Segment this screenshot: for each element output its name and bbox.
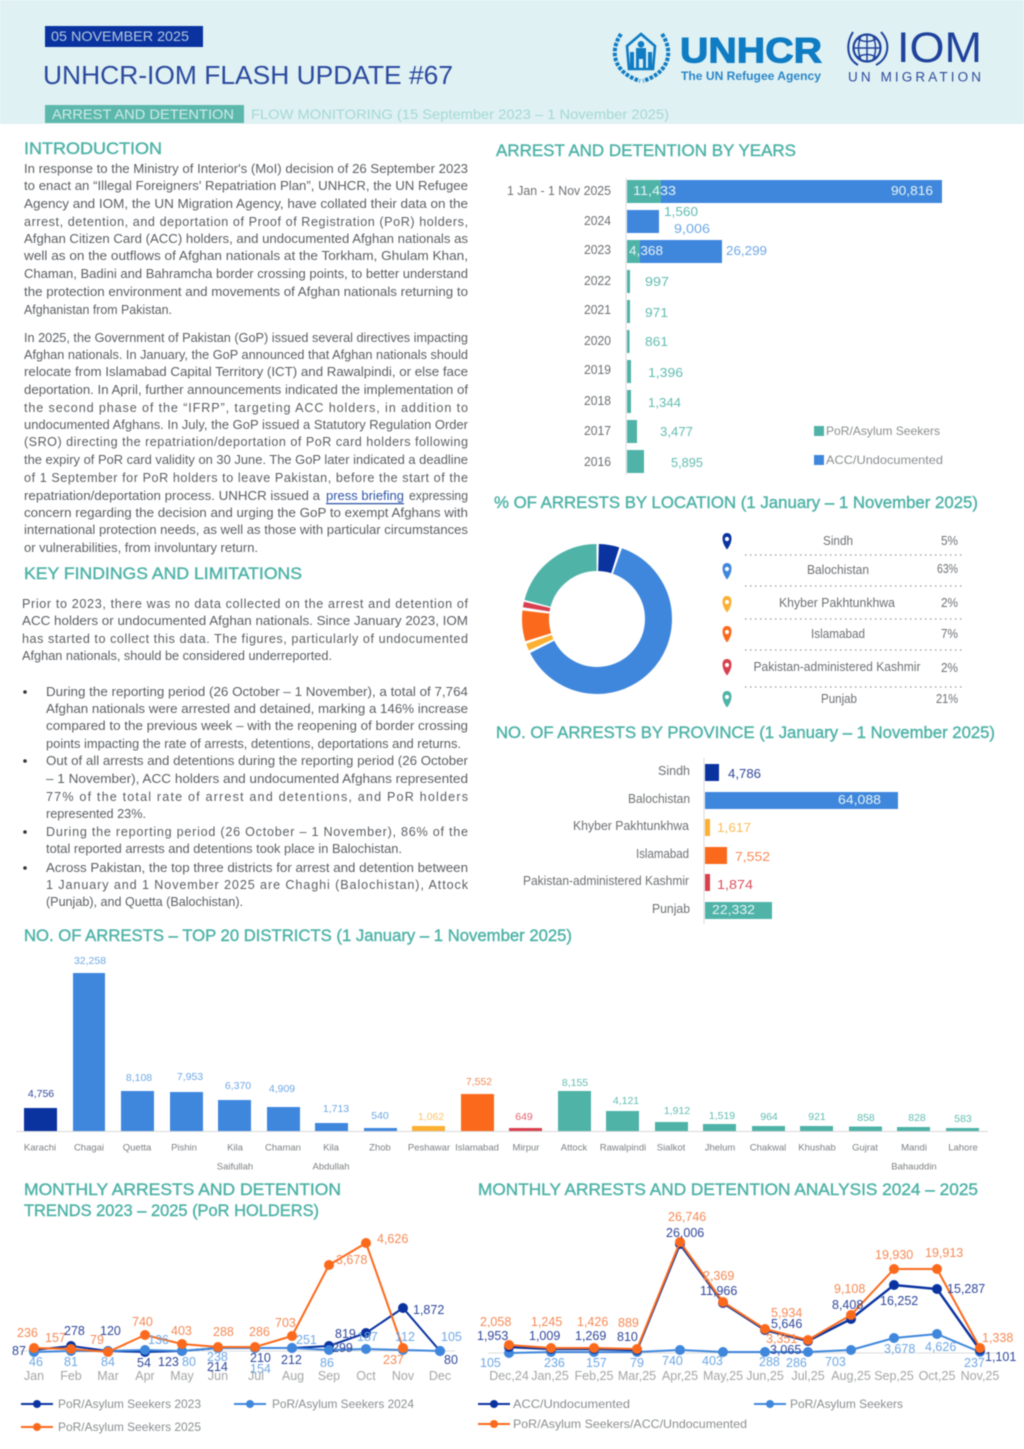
line chart: monthly analysis: 1,009 [529, 1329, 560, 1343]
text block: introduction paragraph 2: international protection needs, as well as those with particular circumstances [24, 523, 468, 537]
line chart: monthly analysis: Apr,25 [662, 1369, 698, 1383]
line chart: monthly trends: 120 [100, 1324, 121, 1338]
text block: bullet list: compared to the previous week – with the reopening of border crossing [46, 719, 468, 733]
icon: pin Khyber Pakhtunkhwa [722, 596, 732, 612]
line chart: monthly trends: May [170, 1369, 195, 1383]
line chart: monthly analysis: 810 [617, 1330, 638, 1344]
line chart: monthly trends: 214 [207, 1360, 228, 1374]
chart legend: by years [814, 424, 943, 467]
line chart: monthly analysis: Jun,25 [746, 1369, 784, 1383]
line chart: monthly analysis: 8,408 [832, 1298, 863, 1312]
line chart: monthly analysis: Mar,25 [618, 1369, 656, 1383]
line chart: monthly trends: 81 [64, 1355, 78, 1369]
line chart: monthly trends: 278 [64, 1324, 85, 1338]
chart legend: monthly analysis: PoR/Asylum Seekers [790, 1397, 903, 1411]
location legend: Sindh [823, 534, 853, 548]
logo: UNHCR [615, 32, 822, 83]
line chart: monthly analysis: 11,966 [700, 1284, 737, 1298]
logo: UNHCR: UNHCR [680, 32, 822, 70]
line chart: monthly trends: 3,678 [336, 1253, 367, 1267]
line chart: monthly analysis: Jan,25 [531, 1369, 569, 1383]
bar chart: top 20 districts: Saifullah [217, 1162, 253, 1172]
line chart: monthly analysis: 3,351 [766, 1332, 797, 1346]
chart legend: monthly analysis [478, 1397, 903, 1431]
line chart: monthly analysis: 3,065 [770, 1343, 801, 1357]
chart legend: monthly trends: PoR/Asylum Seekers 2024 [272, 1397, 414, 1411]
bar chart: top 20 districts: Quetta [123, 1142, 152, 1154]
bar chart: by years: 2023 [584, 243, 611, 257]
line chart: monthly trends: 1,872 [413, 1303, 444, 1317]
line chart: monthly analysis: 288 [759, 1355, 780, 1369]
line chart: monthly analysis: 889 [618, 1316, 639, 1330]
location legend: Pakistan-administered Kashmir [754, 660, 920, 674]
text block: bullet list: – 1 November), ACC holders and undocumented Afghans represented [46, 772, 468, 786]
line chart: monthly analysis: 236 [544, 1356, 565, 1370]
bar chart: top 20 districts: 828 [908, 1112, 926, 1124]
heading: monthly analysis: MONTHLY ARRESTS AND DETENTION ANALYSIS 2024 – 2025 [478, 1181, 978, 1199]
text block: introduction paragraph 2: the expiry of PoR card validity on 30 June. The GoP later indicated a deadline [24, 453, 468, 467]
bar chart: top 20 districts [16, 955, 988, 1172]
panel: top 20 districts [16, 927, 988, 1172]
line chart: monthly analysis: Aug,25 [831, 1369, 871, 1383]
panel: arrest and detention by years [496, 142, 943, 475]
bar chart: top 20 districts: 964 [760, 1111, 778, 1123]
bar chart: top 20 districts: Peshawar [408, 1142, 450, 1154]
bar chart: by years: 3,477 [660, 425, 693, 439]
location legend [722, 533, 963, 708]
line chart: monthly trends: 154 [250, 1362, 271, 1376]
bar chart: top 20 districts: Lahore [948, 1142, 978, 1154]
bar chart: by years: 2019 [584, 363, 611, 377]
text block: bullet list: During the reporting period (26 October – 1 November), 86% of the [46, 825, 468, 839]
bar chart: top 20 districts: 4,756 [28, 1088, 54, 1100]
text block: bullet list: total reported arrests and detentions took place in Balochistan. [46, 842, 402, 856]
bar chart: by province: Khyber Pakhtunkhwa [573, 819, 689, 833]
line chart: monthly analysis: 740 [662, 1354, 683, 1368]
text block: introduction paragraph 1: arrest, detention, and deportation of Proof of Registration (PoR) holders, [24, 215, 468, 229]
bar chart: top 20 districts: Attock [561, 1142, 587, 1154]
bar chart: top 20 districts: 6,370 [225, 1080, 251, 1092]
bar chart: top 20 districts: 1,519 [709, 1110, 735, 1122]
text block: introduction paragraph 2 [24, 331, 469, 555]
line chart: monthly trends: Feb [60, 1369, 82, 1383]
bar chart: top 20 districts: Zhob [369, 1142, 391, 1154]
text block: introduction paragraph 2: or vulnerabilities, from involuntary return. [24, 541, 258, 555]
line chart: monthly analysis: 1,245 [531, 1315, 562, 1329]
text block: introduction paragraph 1: Afghan Citizen Card (ACC) holders, and undocumented Afghan nationals as [24, 232, 468, 246]
line chart: monthly trends: 288 [213, 1325, 234, 1339]
text block: introduction paragraph 1: the protection environment and movements of Afghan nationals returning to [24, 285, 468, 299]
bar chart: top 20 districts: Jhelum [705, 1142, 735, 1154]
line chart: monthly trends: Mar [97, 1369, 119, 1383]
line chart: monthly trends: 84 [101, 1355, 115, 1369]
bar chart: top 20 districts: 7,552 [466, 1076, 492, 1088]
bar chart: top 20 districts: Pishin [171, 1142, 197, 1154]
line chart: monthly analysis: 4,626 [925, 1340, 956, 1354]
line chart: monthly trends: Jan [24, 1369, 44, 1383]
line chart: monthly analysis [477, 1210, 1016, 1383]
line chart: monthly trends: 237 [383, 1353, 404, 1367]
text block: introduction paragraph 2: press briefing [326, 489, 404, 503]
panel: introduction [23, 140, 469, 555]
bar chart: top 20 districts: 1,062 [418, 1111, 444, 1123]
line chart: monthly analysis: 157 [586, 1356, 607, 1370]
text block: introduction paragraph 1: to enact an “Illegal Foreigners' Repatriation Plan”, UNHCR, the UN Refugee [24, 179, 468, 193]
line chart: monthly trends: 740 [132, 1315, 153, 1329]
line chart: monthly trends: Dec [429, 1369, 451, 1383]
chart legend: by years: ACC/Undocumented [826, 453, 943, 467]
line chart: monthly analysis: 5,934 [771, 1306, 802, 1320]
bar chart: top 20 districts: Chaman [265, 1142, 301, 1154]
line chart: monthly analysis: 9,108 [834, 1282, 865, 1296]
icon: pin Balochistan [722, 563, 732, 580]
line chart: monthly trends: 87 [12, 1344, 26, 1358]
chart legend: monthly trends: PoR/Asylum Seekers 2023 [58, 1397, 201, 1411]
bar chart: top 20 districts: 1,713 [323, 1103, 349, 1115]
location legend: Balochistan [807, 563, 869, 577]
bar chart: top 20 districts: 7,953 [177, 1071, 203, 1083]
line chart: monthly analysis: 286 [786, 1356, 807, 1370]
bar chart: by years: 2024 [584, 214, 611, 228]
location legend: 7% [941, 627, 958, 641]
text block: introduction paragraph 1: Agency and IOM, the UN Migration Agency, have collated their data on the [24, 197, 468, 211]
line chart: monthly trends: 286 [249, 1325, 270, 1339]
text block: introduction paragraph 2: of 1 September for PoR holders to leave Pakistan, before the start of the [24, 471, 468, 485]
bar chart: top 20 districts: Khushab [798, 1142, 836, 1154]
chart legend: monthly analysis: PoR/Asylum Seekers/ACC/Undocumented [513, 1417, 747, 1431]
bar chart: top 20 districts: 540 [371, 1110, 389, 1122]
line chart: monthly analysis: 403 [702, 1354, 723, 1368]
text block: bullet list: Across Pakistan, the top three districts for arrest and detention between [46, 861, 468, 875]
line chart: monthly trends: 123 [158, 1355, 179, 1369]
bar chart: by years: 2022 [584, 274, 611, 288]
text block: introduction paragraph 1: Afghanistan from Pakistan. [24, 303, 172, 317]
line chart: monthly trends: 212 [281, 1353, 302, 1367]
bar chart: by province: 1,874 [717, 878, 753, 892]
line chart: monthly analysis: 5,646 [771, 1317, 802, 1331]
text block: bullet list: Afghan nationals were arrested and detained, marking a 146% increase [46, 702, 468, 716]
bar chart: by years: 2017 [584, 424, 611, 438]
text block: limitations paragraph: ACC holders or undocumented Afghan nationals. Since January 2023, IOM [22, 614, 468, 628]
text block: bullet list: During the reporting period (26 October – 1 November), a total of 7,764 [46, 685, 468, 699]
bar chart: by years: 861 [645, 335, 668, 349]
line chart: monthly analysis: Nov,25 [961, 1369, 999, 1383]
bar chart: by province: Punjab [652, 902, 690, 916]
location legend: Punjab [821, 692, 857, 706]
text block: limitations paragraph: Prior to 2023, there was no data collected on the arrest and detention of [22, 597, 468, 611]
line chart: monthly analysis: Oct,25 [919, 1369, 955, 1383]
line chart: monthly trends: 105 [441, 1330, 462, 1344]
bar chart: top 20 districts: 8,155 [562, 1077, 588, 1089]
line chart: monthly trends: 86 [320, 1356, 334, 1370]
bar chart: top 20 districts: Chakwal [750, 1142, 786, 1154]
heading: by years: ARREST AND DETENTION BY YEARS [496, 142, 796, 160]
bar chart: by years [507, 178, 942, 475]
line chart: monthly trends: 4,626 [377, 1232, 408, 1246]
line chart: monthly trends: 299 [332, 1341, 353, 1355]
line chart: monthly analysis: 2,369 [703, 1269, 734, 1283]
line chart: monthly trends: Apr [135, 1369, 155, 1383]
line chart: monthly analysis: 15,287 [947, 1282, 985, 1296]
title: UNHCR-IOM FLASH UPDATE #67 [43, 60, 453, 90]
text block: limitations paragraph [22, 597, 468, 663]
bar chart: by years: 1,396 [648, 366, 683, 380]
location legend: Islamabad [811, 627, 865, 641]
icon: pin Punjab [722, 691, 732, 708]
bar chart: top 20 districts: Sialkot [657, 1142, 686, 1154]
line chart: monthly analysis: Feb,25 [575, 1369, 614, 1383]
bar chart: top 20 districts: Abdullah [313, 1162, 349, 1172]
heading: by province: NO. OF ARRESTS BY PROVINCE (1 January – 1 November 2025) [496, 724, 995, 742]
bar chart: by years: 971 [645, 306, 668, 320]
bar chart: by years: 26,299 [726, 244, 767, 258]
text block: limitations paragraph: has started to collect this data. The figures, particularly of undocumented [22, 632, 468, 646]
chart legend: monthly analysis: ACC/Undocumented [513, 1397, 630, 1411]
location legend: Khyber Pakhtunkhwa [779, 596, 895, 610]
line chart: monthly analysis: Sep,25 [874, 1369, 914, 1383]
line chart: monthly trends: 403 [171, 1324, 192, 1338]
line chart: monthly trends: 210 [250, 1351, 271, 1365]
line chart: monthly analysis: 19,930 [875, 1248, 913, 1262]
bar chart: by years: 1 Jan - 1 Nov 2025 [507, 184, 611, 198]
line chart: monthly trends: Jul [248, 1369, 264, 1383]
line chart: monthly analysis: 105 [480, 1356, 501, 1370]
line chart: monthly analysis: 1,338 [982, 1331, 1013, 1345]
line chart: monthly analysis: 703 [825, 1355, 846, 1369]
line chart: monthly analysis: 16,252 [880, 1294, 918, 1308]
line chart: monthly trends: 251 [296, 1333, 317, 1347]
bar chart: top 20 districts: 32,258 [74, 955, 106, 967]
text block: introduction paragraph 2: repatriation/deportation process. UNHCR issued a [24, 489, 320, 503]
icon: pin Islamabad [722, 626, 732, 642]
line chart: monthly analysis: 1,269 [575, 1329, 606, 1343]
line chart: monthly trends: 80 [444, 1353, 458, 1367]
heading: by location: % OF ARRESTS BY LOCATION (1 January – 1 November 2025) [494, 494, 978, 512]
bar chart: by years: 2016 [584, 455, 611, 469]
chart legend: monthly trends [21, 1397, 414, 1434]
line chart: monthly trends: 236 [17, 1326, 38, 1340]
line chart: monthly analysis: 3,678 [884, 1342, 915, 1356]
bar chart: by province: 64,088 [838, 793, 881, 807]
date badge [45, 26, 203, 47]
bar chart: top 20 districts: 583 [954, 1113, 972, 1125]
chart legend: monthly trends: PoR/Asylum Seekers 2025 [58, 1420, 201, 1434]
line chart: monthly trends: 703 [275, 1316, 296, 1330]
bar chart: by province: 1,617 [717, 821, 751, 835]
bar chart: by province: 7,552 [735, 850, 770, 864]
bar chart: top 20 districts: Mandi [901, 1142, 927, 1154]
text block: introduction paragraph 2: concern regarding the decision and urging the GoP to exempt Afghans with [24, 506, 468, 520]
line chart: monthly trends: 112 [395, 1330, 415, 1344]
line chart: monthly trends: 819 [335, 1327, 356, 1341]
line chart: monthly trends: 54 [137, 1356, 151, 1370]
line chart: monthly analysis: May,25 [703, 1369, 743, 1383]
icon: pin Sindh [722, 533, 732, 550]
bar chart: top 20 districts: 4,121 [613, 1095, 639, 1107]
bar chart: top 20 districts: Kila [323, 1142, 340, 1154]
location legend: 2% [941, 596, 958, 610]
heading: top 20 districts: NO. OF ARRESTS – TOP 20 DISTRICTS (1 January – 1 November 2025) [24, 927, 572, 945]
line chart: monthly trends [12, 1232, 462, 1383]
location legend: 5% [941, 534, 958, 548]
text block: introduction paragraph 2: Afghan nationals. In January, the GoP announced that Afghan nationals should [24, 348, 468, 362]
line chart: monthly analysis: 1,426 [577, 1315, 608, 1329]
bar chart: top 20 districts: 858 [857, 1112, 875, 1124]
heading: key findings: KEY FINDINGS AND LIMITATIONS [24, 565, 302, 583]
bar chart: top 20 districts: 649 [515, 1111, 533, 1123]
bar chart: by years: 1,344 [648, 396, 681, 410]
panel: percent of arrests by location [494, 494, 978, 708]
bar chart: top 20 districts: Gujrat [852, 1142, 878, 1154]
bar chart: by province: Balochistan [628, 792, 690, 806]
line chart: monthly analysis: 2,058 [480, 1315, 511, 1329]
section tag: ARREST AND DETENTION [52, 106, 234, 122]
bar chart: by years: 2021 [584, 303, 611, 317]
text block: bullet list: (Punjab), and Quetta (Balochistan). [46, 895, 243, 909]
text block: introduction paragraph 2: undocumented Afghans. In July, the GoP issued a Statutory Regulation Order [24, 418, 468, 432]
line chart: monthly trends: Oct [356, 1369, 376, 1383]
text block: bullet list: represented 23%. [46, 807, 146, 821]
bar chart: top 20 districts: Rawalpindi [600, 1142, 646, 1154]
bar chart: top 20 districts: Karachi [24, 1142, 56, 1154]
heading: monthly trends: MONTHLY ARRESTS AND DETENTION [24, 1181, 341, 1199]
bar chart: by years: 1,560 [664, 205, 698, 219]
line chart: monthly trends: Sep [318, 1369, 340, 1383]
text block: introduction paragraph 2: deportation. In April, further announcements indicated the implementation of [24, 383, 469, 397]
bar chart: top 20 districts: 1,912 [664, 1105, 690, 1117]
bar chart: by province: Islamabad [636, 847, 689, 861]
subtitle: FLOW MONITORING (15 September 2023 – 1 November 2025) [251, 106, 669, 122]
bar chart: top 20 districts: Bahauddin [891, 1162, 937, 1172]
bar chart: by province [523, 758, 898, 924]
text block: introduction paragraph 2: relocate from Islamabad Capital Territory (ICT) and Rawalpindi, or else face [24, 365, 468, 379]
bar chart: by years: 9,006 [674, 222, 710, 236]
text block: introduction paragraph 2: expressing [409, 489, 468, 503]
line chart: monthly analysis: 1,101 [985, 1350, 1016, 1364]
bar chart: top 20 districts: Kila [227, 1142, 244, 1154]
text block: introduction paragraph 1: Chaman, Badini and Bahramcha border crossing points, to better understand [24, 267, 468, 281]
text block: bullet list [23, 685, 469, 909]
chart legend: by years: PoR/Asylum Seekers [826, 424, 940, 438]
location legend: 21% [936, 692, 958, 706]
line chart: monthly trends: Aug [282, 1369, 304, 1383]
line chart: monthly analysis: 26,006 [666, 1226, 704, 1240]
heading: monthly trends [24, 1181, 341, 1220]
text block: bullet list: points impacting the rate of arrests, detentions, deportations and returns. [46, 737, 461, 751]
bar chart: by years: 2020 [584, 334, 611, 348]
text block: introduction paragraph 1: well as on the outflows of Afghan nationals at the Torkham, Ghulam Khan, [23, 249, 468, 263]
line chart: monthly analysis: Dec,24 [489, 1369, 529, 1383]
logo: IOM: IOM [897, 24, 982, 72]
panel: arrests by province [496, 724, 995, 924]
location legend: 2% [941, 661, 958, 675]
logo: UNHCR: The UN Refugee Agency [681, 69, 821, 83]
text block: bullet list: 1 January and 1 November 2025 are Chaghi (Balochistan), Attock [46, 878, 469, 892]
line chart: monthly trends: 79 [90, 1333, 104, 1347]
line chart: monthly trends: 238 [207, 1350, 228, 1364]
bar chart: top 20 districts: 8,108 [126, 1072, 152, 1084]
line chart: monthly analysis: 237 [964, 1356, 985, 1370]
logo: IOM: UN MIGRATION [848, 70, 981, 84]
bar chart: top 20 districts: Chagai [74, 1142, 104, 1154]
line chart: monthly trends: Nov [392, 1369, 415, 1383]
logo: IOM [848, 24, 982, 84]
text block: limitations paragraph: Afghan nationals, should be considered underreported. [22, 649, 332, 663]
line chart: monthly trends: Jun [208, 1369, 228, 1383]
bar chart: by years: 997 [645, 275, 669, 289]
bar chart: by years: 2018 [584, 394, 611, 408]
bar chart: by years: 11,433 [633, 184, 676, 198]
line chart: monthly trends: 157 [45, 1331, 66, 1345]
text block: introduction paragraph 2: the second phase of the “IFRP”, targeting ACC holders, in addition to [24, 401, 468, 415]
line chart: monthly analysis: 1,953 [477, 1329, 508, 1343]
bar chart: by province: Pakistan-administered Kashmir [523, 874, 689, 888]
line chart: monthly trends: 136 [148, 1333, 169, 1347]
line chart: monthly trends: 80 [182, 1355, 196, 1369]
panel: monthly analysis [477, 1181, 1016, 1431]
heading: monthly trends: TRENDS 2023 – 2025 (PoR HOLDERS) [24, 1202, 319, 1220]
bar chart: by years: 5,895 [671, 456, 703, 470]
text block: introduction paragraph 2: (SRO) directing the repatriation/deportation of PoR card holders following [24, 435, 468, 449]
bar chart: top 20 districts: Mirpur [513, 1142, 539, 1154]
line chart: monthly analysis: 26,746 [668, 1210, 706, 1224]
bar chart: top 20 districts: Islamabad [455, 1142, 499, 1154]
bar chart: by years: 4,368 [629, 244, 663, 258]
bar chart: by province: 22,332 [712, 903, 755, 917]
panel: key findings [22, 565, 469, 909]
icon: pin Kashmir [722, 659, 732, 676]
text block: introduction paragraph 2: In 2025, the Government of Pakistan (GoP) issued several directives impacting [24, 331, 468, 345]
line chart: monthly analysis: Jul,25 [791, 1369, 825, 1383]
line chart: monthly trends: 187 [357, 1330, 378, 1344]
heading: introduction: INTRODUCTION [24, 140, 162, 158]
location legend: 63% [937, 562, 958, 576]
text block: bullet list: Out of all arrests and detentions during the reporting period (26 October [46, 754, 468, 768]
donut chart [536, 558, 658, 680]
line chart: monthly analysis: 79 [630, 1356, 644, 1370]
bar chart: top 20 districts: 4,909 [269, 1083, 295, 1095]
bar chart: by years: 90,816 [891, 184, 933, 198]
text block: introduction paragraph 1: In response to the Ministry of Interior's (MoI) decision of 26 September 2023 [24, 162, 468, 176]
bar chart: top 20 districts: 921 [808, 1111, 826, 1123]
text block: bullet list: 77% of the total rate of arrest and detentions, and PoR holders [46, 790, 468, 804]
header band [0, 0, 1024, 124]
text block: introduction paragraph 1 [23, 162, 468, 317]
bar chart: by province: Sindh [658, 764, 690, 778]
bar chart: by province: 4,786 [728, 767, 761, 781]
line chart: monthly analysis: 19,913 [925, 1246, 963, 1260]
panel: monthly trends PoR holders [12, 1181, 462, 1434]
line chart: monthly trends: 46 [29, 1355, 43, 1369]
date badge: 05 NOVEMBER 2025 [51, 28, 189, 44]
